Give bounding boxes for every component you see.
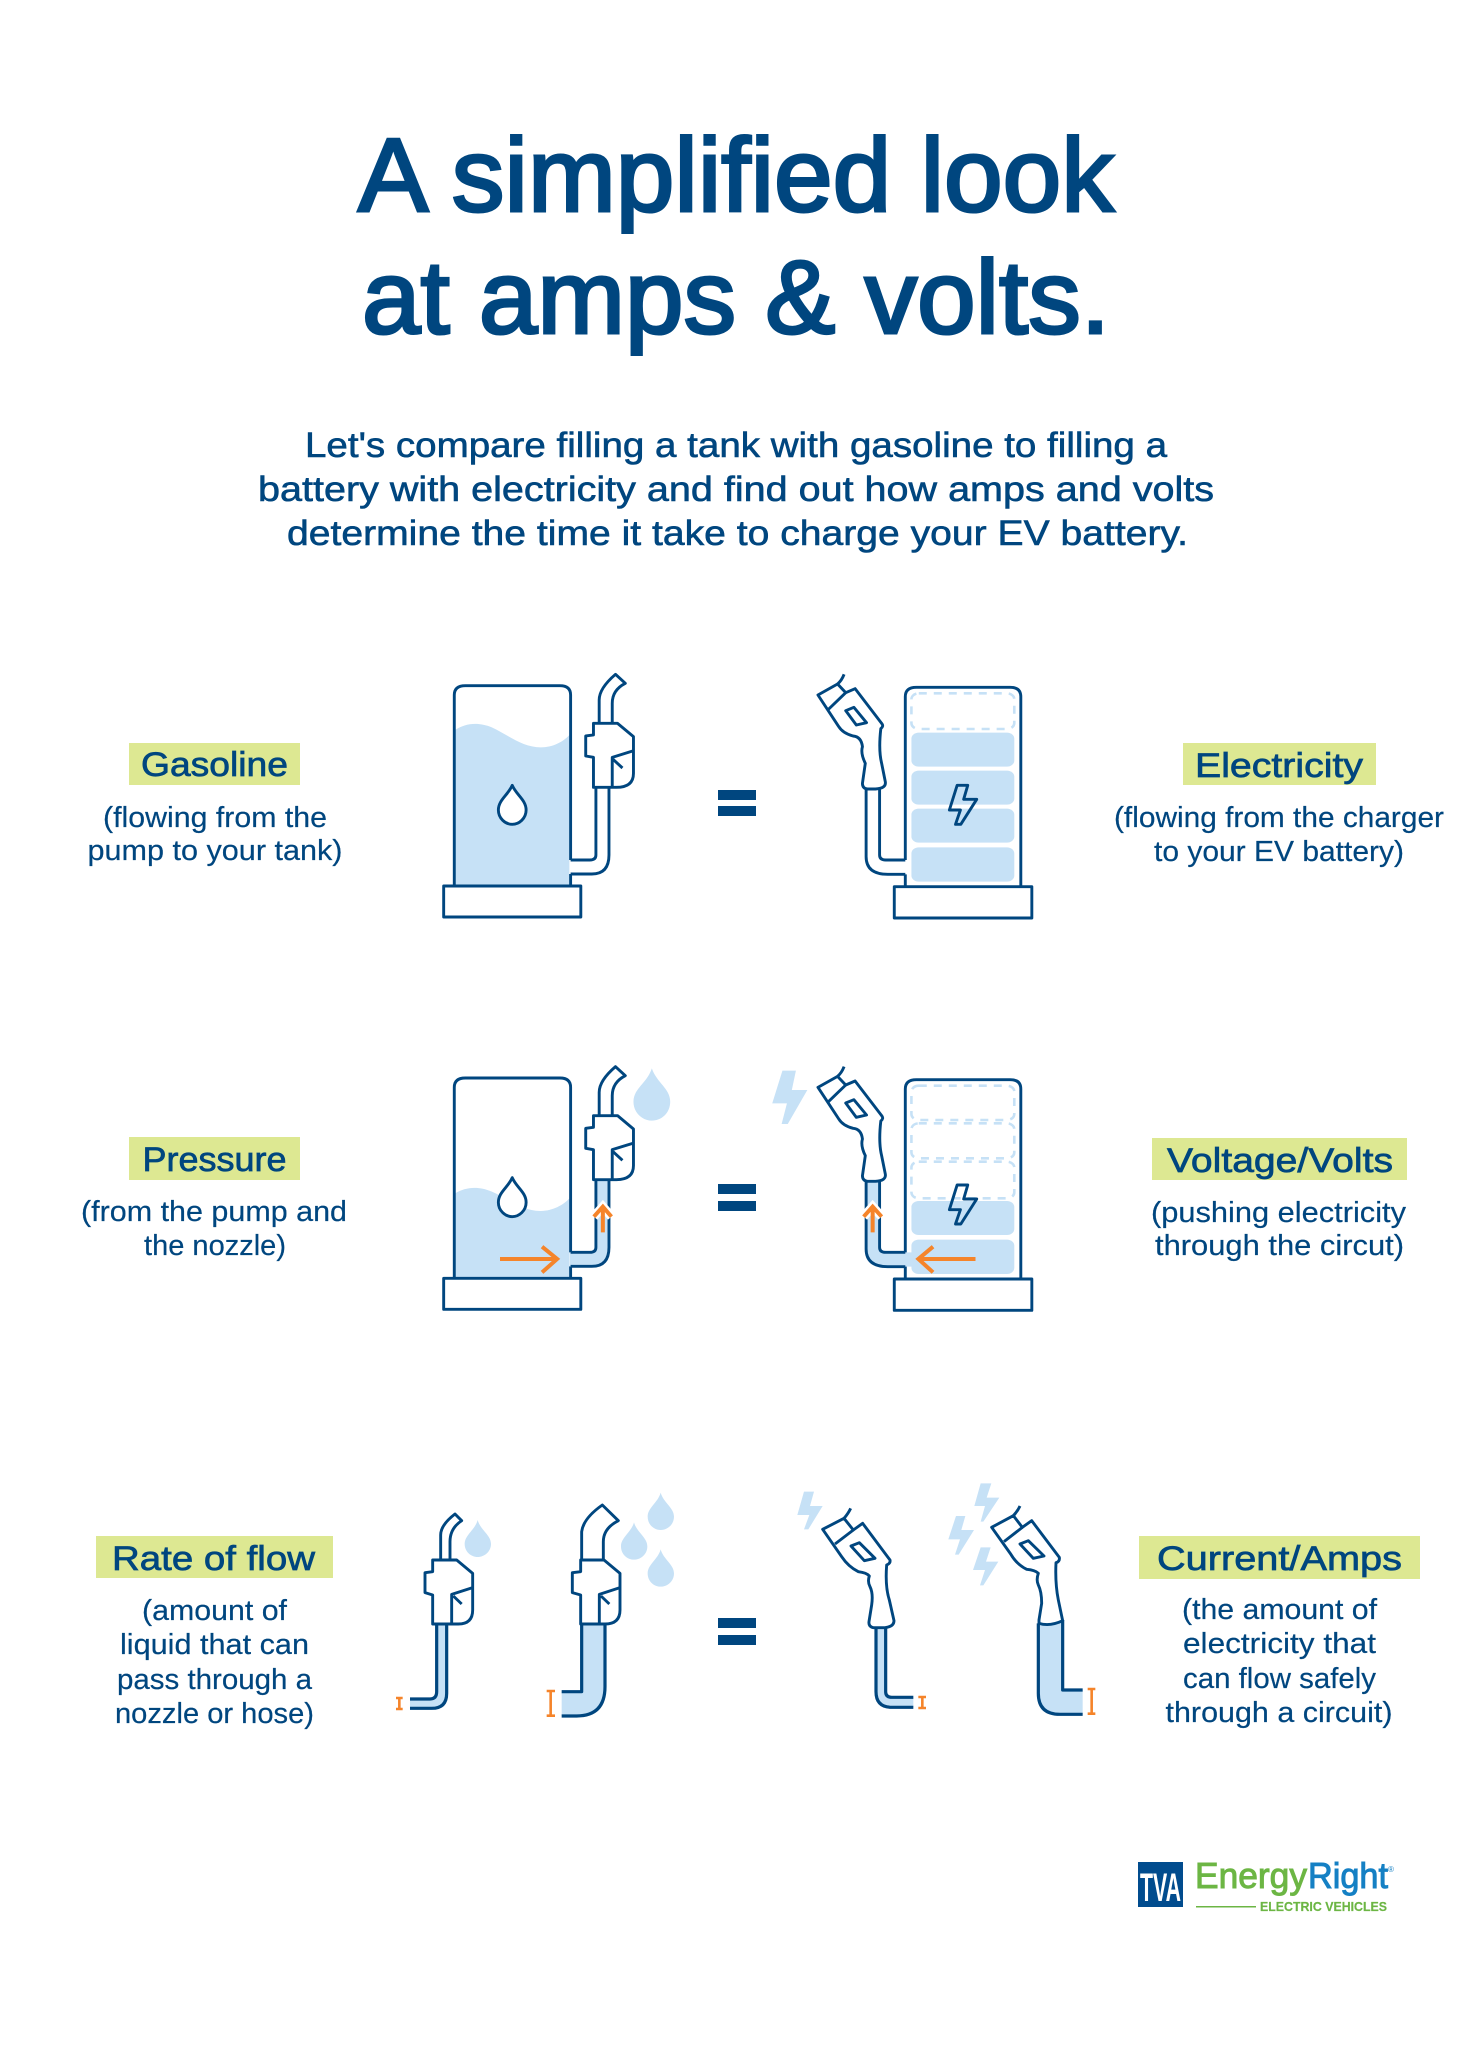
icon: gas tank and nozzle, full xyxy=(444,674,633,917)
label: electricity xyxy=(1114,743,1444,868)
logo: TVA EnergyRight Electric Vehicles: ELECTRIC VEHICLES xyxy=(1260,1899,1387,1914)
icon: small charger, low current xyxy=(797,1492,926,1708)
logo: TVA EnergyRight Electric Vehicles: Energy xyxy=(1195,1855,1307,1896)
logo: TVA EnergyRight Electric Vehicles: TVA xyxy=(1140,1866,1181,1910)
intro text: Let's compare filling a tank with gasoline to filling a xyxy=(305,426,1168,465)
label: current/amps: electricity that xyxy=(1183,1628,1376,1660)
intro text: battery with electricity and find out how amps and volts xyxy=(258,470,1214,509)
label: rate of flow: liquid that can xyxy=(120,1629,309,1661)
title xyxy=(358,118,1115,356)
label: pressure: (from the pump and xyxy=(81,1196,347,1228)
icon: battery and charger, full xyxy=(818,674,1032,918)
label: gasoline: pump to your tank) xyxy=(88,835,342,867)
logo: TVA EnergyRight Electric Vehicles: ® xyxy=(1388,1865,1394,1874)
label: electricity: to your EV battery) xyxy=(1154,836,1404,868)
icon: battery and charger with voltage arrows xyxy=(772,1067,1032,1310)
equals sign xyxy=(718,790,756,816)
label: pressure xyxy=(81,1137,347,1262)
label: voltage/volts: Voltage/Volts xyxy=(1167,1142,1393,1180)
label: current/amps xyxy=(1139,1536,1420,1729)
label: electricity: (flowing from the charger xyxy=(1114,802,1444,834)
logo: TVA EnergyRight Electric Vehicles xyxy=(1138,1855,1394,1914)
equals sign xyxy=(718,1618,756,1645)
label: pressure: the nozzle) xyxy=(144,1230,286,1262)
label: rate of flow: pass through a xyxy=(117,1664,313,1696)
label: voltage/volts xyxy=(1151,1138,1407,1262)
title: at amps & volts. xyxy=(362,240,1110,356)
label: voltage/volts: through the circut) xyxy=(1155,1230,1404,1262)
title: A simplified look xyxy=(358,118,1115,234)
icon: large gas nozzle, high flow xyxy=(547,1493,674,1716)
equals sign xyxy=(718,1184,756,1211)
label: pressure: Pressure xyxy=(142,1141,286,1179)
label: gasoline xyxy=(88,743,342,867)
label: gasoline: (flowing from the xyxy=(103,802,327,834)
intro text: determine the time it take to charge your EV battery. xyxy=(287,514,1188,553)
intro text xyxy=(258,426,1214,553)
label: current/amps: Current/Amps xyxy=(1157,1540,1402,1578)
label: voltage/volts: (pushing electricity xyxy=(1151,1197,1407,1229)
icon: gas tank and nozzle with pressure arrows xyxy=(444,1067,670,1309)
label: rate of flow: (amount of xyxy=(142,1595,288,1627)
label: rate of flow: Rate of flow xyxy=(112,1540,316,1578)
label: current/amps: can flow safely xyxy=(1183,1663,1377,1695)
logo: TVA EnergyRight Electric Vehicles: Right xyxy=(1308,1855,1388,1896)
label: electricity: Electricity xyxy=(1195,747,1363,785)
icon: large charger, high current xyxy=(948,1483,1095,1714)
label: current/amps: through a circuit) xyxy=(1166,1697,1392,1729)
icon: small gas nozzle, low flow xyxy=(396,1514,491,1709)
label: rate of flow xyxy=(96,1536,333,1730)
label: current/amps: (the amount of xyxy=(1182,1594,1378,1626)
label: gasoline: Gasoline xyxy=(141,746,288,784)
label: rate of flow: nozzle or hose) xyxy=(115,1698,314,1730)
